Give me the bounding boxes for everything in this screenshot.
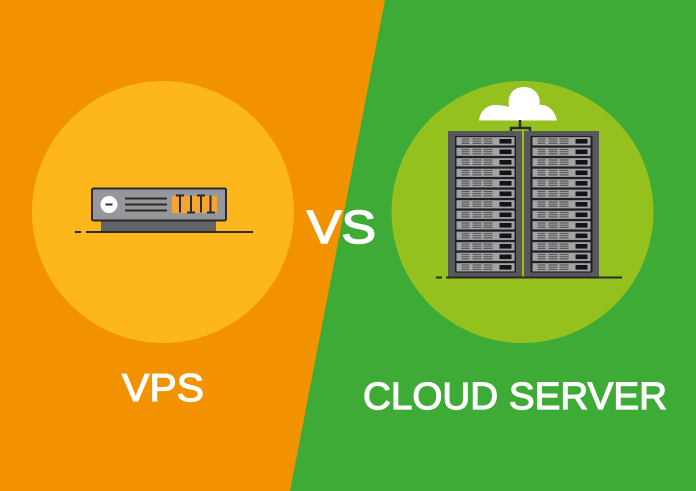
label: VPS: VPS [122, 367, 204, 410]
icon: cloud [479, 87, 557, 120]
panel: cloud server circle [392, 81, 654, 343]
panel: VPS circle [32, 81, 294, 343]
icon: VPS server [75, 188, 253, 232]
icon: right server rack [524, 131, 599, 277]
vent lines [125, 198, 167, 210]
server body [92, 188, 226, 220]
icon: connector between cloud and racks [511, 120, 530, 134]
icon: left server rack [448, 131, 522, 277]
panel: orange diagonal background [0, 0, 385, 491]
label: CLOUD SERVER: CLOUD SERVER [363, 376, 667, 418]
rack ground line [436, 276, 622, 278]
orange drive bays [172, 196, 217, 213]
ground line [75, 231, 253, 233]
power button [100, 196, 118, 213]
label: VS: VS [307, 201, 376, 253]
server base [101, 220, 216, 232]
